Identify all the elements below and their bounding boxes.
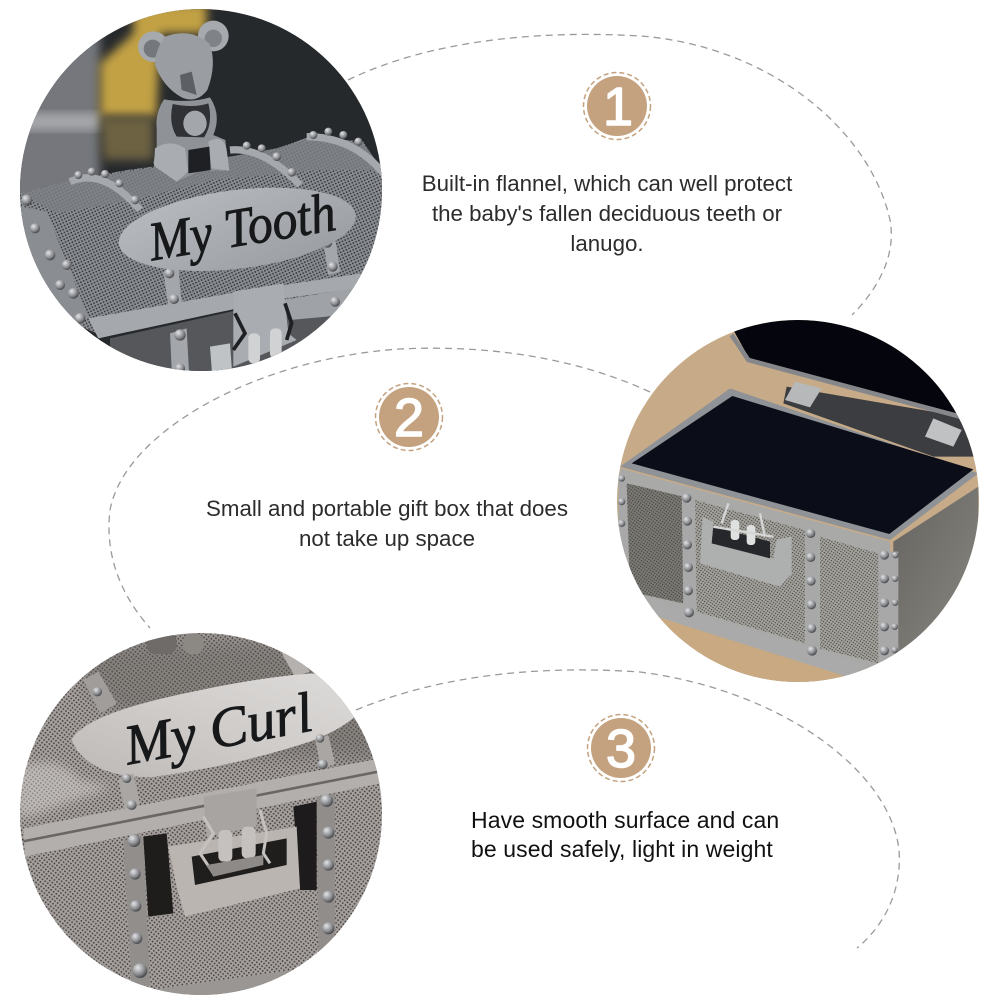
caption 1: the baby's fallen deciduous teeth or <box>432 201 783 226</box>
plaque text: My Curl <box>118 682 317 778</box>
tan table background <box>617 320 979 682</box>
number badge 3: 3 <box>606 719 636 779</box>
dashed connector arc 1 <box>348 34 891 315</box>
plaque clips <box>118 735 335 810</box>
stippled box surface <box>20 633 382 995</box>
caption 3: Have smooth surface and can <box>471 807 779 833</box>
box lid <box>20 137 383 390</box>
dashed connector arc 2 <box>109 348 650 628</box>
number badge 2: 2 <box>394 388 424 448</box>
shaded lid area <box>17 640 383 817</box>
rivets <box>93 687 334 978</box>
photo circle: My Tooth box with bear <box>20 9 382 371</box>
photo circle: open box with dark lining <box>617 320 979 682</box>
right side face <box>893 487 978 660</box>
blurred background <box>20 9 382 371</box>
number badge 1 <box>584 72 650 140</box>
metal straps <box>618 473 898 663</box>
interior and rim <box>620 388 978 540</box>
caption 3: be used safely, light in weight <box>471 836 773 862</box>
padlock <box>168 788 300 917</box>
padlock <box>700 503 792 587</box>
dashed connector arc 3 <box>356 670 899 948</box>
number badge 1: 1 <box>603 77 633 137</box>
lid strap left <box>83 672 117 713</box>
open lid <box>730 320 974 457</box>
photo circle: My Curl box close-up <box>20 633 382 995</box>
name plaque <box>118 188 356 271</box>
plaque text: My Tooth <box>143 181 340 273</box>
bear figurine <box>138 21 229 182</box>
horizontal lid bar <box>23 758 380 857</box>
top handle feet <box>147 633 203 654</box>
caption 1: lanugo. <box>570 231 644 256</box>
front face <box>620 468 893 682</box>
name plaque <box>72 673 355 778</box>
lid strap right <box>282 653 310 675</box>
rivets <box>618 475 899 656</box>
number badge 2 <box>376 384 442 450</box>
vertical straps <box>123 793 335 1002</box>
rivets <box>21 128 362 373</box>
number badge 3 <box>588 714 654 782</box>
caption 1: Built-in flannel, which can well protect <box>422 171 793 196</box>
caption 2: Small and portable gift box that does <box>206 496 568 521</box>
caption 2: not take up space <box>299 526 475 551</box>
lock clasp <box>210 284 296 370</box>
